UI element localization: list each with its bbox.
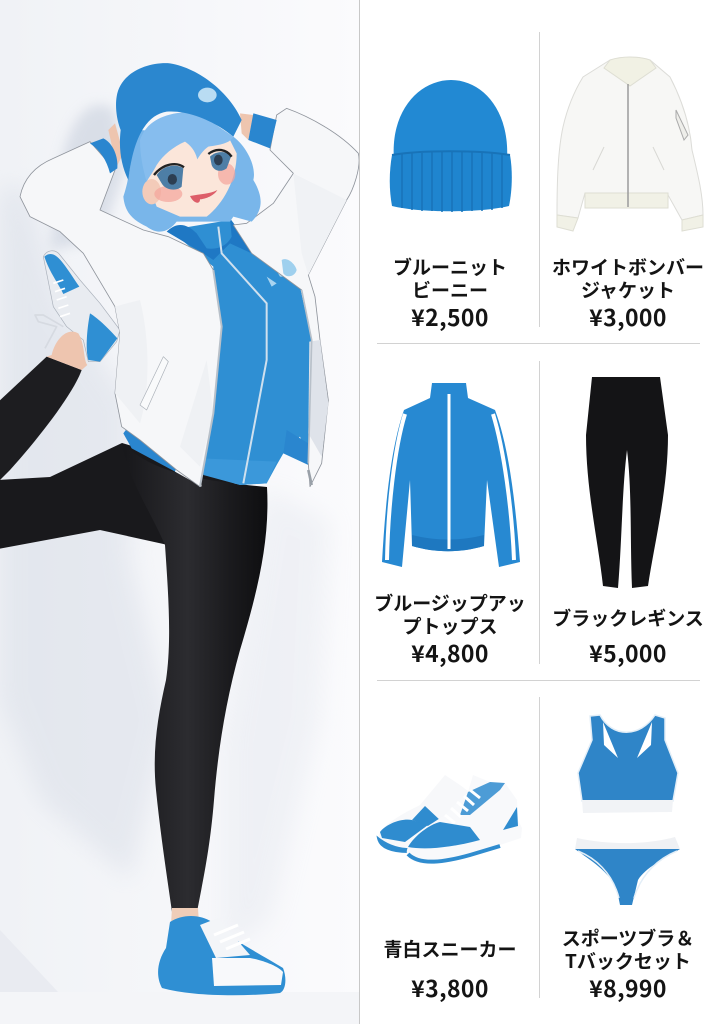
character: blue beanie — [116, 63, 242, 180]
character: raised shin — [0, 357, 82, 483]
character: face — [142, 127, 237, 217]
character: standing leg and hips — [122, 443, 267, 912]
product: blue zip-up top: ブルージップアッ — [374, 589, 526, 616]
product: blue knit beanie: ブルーニット — [393, 253, 507, 280]
icon: white bomber jacket — [557, 57, 703, 231]
character: blue top — [167, 218, 312, 485]
product: black leggings: ¥5,000 — [589, 635, 667, 669]
icon: sports bra and briefs set — [575, 715, 680, 905]
product: blue knit beanie: ¥2,500 — [411, 299, 489, 333]
product: blue and white sneakers: 青白スニーカー — [383, 935, 517, 962]
character: bangs — [140, 112, 233, 182]
product: sports bra and briefs set — [562, 924, 694, 1004]
character: jacket hem — [123, 427, 308, 487]
back shoe — [378, 775, 480, 852]
front shoe — [407, 775, 522, 864]
character: ankle — [170, 908, 200, 940]
icon: black leggings — [586, 377, 668, 588]
product: black leggings: ブラックレギンス — [552, 604, 704, 631]
product: sports bra and briefs set: ¥8,990 — [589, 970, 667, 1004]
icon: standing sneaker — [158, 916, 285, 995]
panel divider — [358, 0, 360, 1024]
product: blue knit beanie — [393, 253, 507, 333]
product: sports bra and briefs set: Tバックセット — [565, 947, 691, 974]
icon: blue and white sneakers — [378, 775, 522, 864]
product: blue zip-up top — [374, 589, 526, 669]
product: sports bra and briefs set: スポーツブラ＆ — [562, 924, 694, 951]
character: white bomber jacket — [20, 108, 359, 487]
product: blue zip-up top: ¥4,800 — [411, 635, 489, 669]
product: blue and white sneakers: ¥3,800 — [411, 970, 489, 1004]
product: white bomber jacket: ¥3,000 — [589, 299, 667, 333]
product: blue zip-up top: プトップス — [402, 612, 498, 639]
product: white bomber jacket — [552, 253, 704, 333]
character: jacket cuffs — [90, 113, 277, 173]
panel: character illustration — [0, 0, 359, 1024]
character: hair — [123, 130, 261, 232]
product: blue knit beanie: ビーニー — [412, 276, 488, 303]
product: blue and white sneakers — [383, 935, 517, 1004]
character: upper body — [0, 63, 359, 487]
product: white bomber jacket: ジャケット — [581, 276, 675, 303]
character: raised ankle — [47, 332, 87, 370]
product: white bomber jacket: ホワイトボンバー — [552, 253, 704, 280]
character: raised leg thigh — [0, 443, 240, 549]
wall shadow — [0, 105, 330, 950]
character: hands — [108, 113, 253, 167]
icon: raised sneaker — [35, 251, 120, 362]
product: black leggings — [552, 604, 704, 669]
icon: blue zip-up top — [382, 383, 520, 567]
grid dividers — [377, 32, 700, 998]
icon: blue knit beanie — [390, 80, 512, 212]
